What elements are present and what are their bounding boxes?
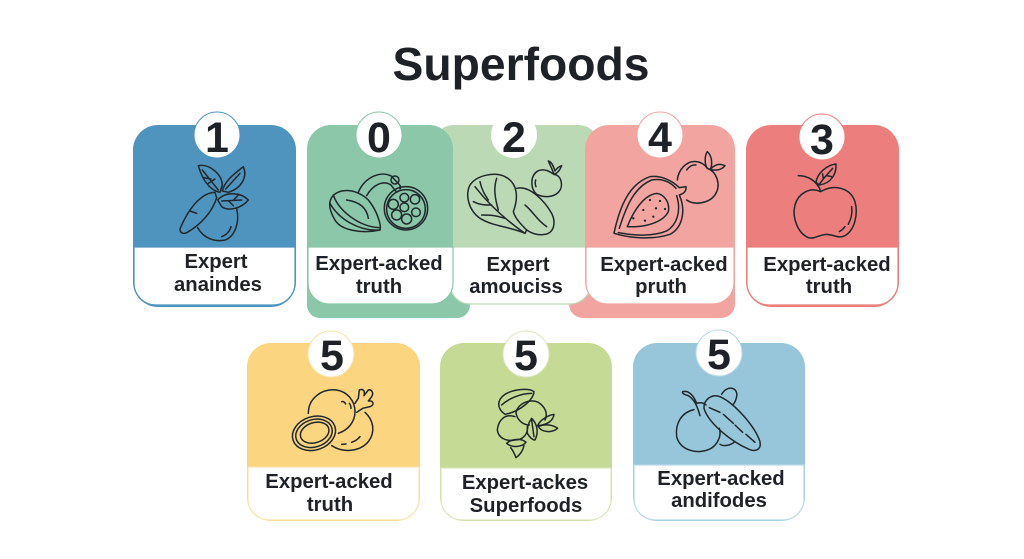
badge 5 xyxy=(308,331,354,380)
card 7: lime, Expert-ackes Superfoods xyxy=(440,331,612,521)
label xyxy=(462,472,588,517)
label: truth xyxy=(307,494,353,516)
icon: papaya half and fruit xyxy=(614,152,725,238)
card 4: salmon, Expert-acked pruth xyxy=(585,112,735,305)
label: amouciss xyxy=(469,276,563,298)
badge 5: 5 xyxy=(320,332,344,380)
badge 0: 0 xyxy=(367,114,391,162)
label: Expert xyxy=(184,251,248,273)
icon: carrot, orange and leaves xyxy=(180,165,248,241)
label xyxy=(600,254,728,298)
badge 3: 3 xyxy=(810,116,834,164)
badge 0 xyxy=(356,112,402,162)
label xyxy=(265,471,393,516)
label: truth xyxy=(356,276,402,298)
label: anaindes xyxy=(174,274,262,296)
label: Expert xyxy=(486,254,550,276)
label: Expert-acked xyxy=(265,471,393,493)
label: Expert-acked xyxy=(763,254,891,276)
label: truth xyxy=(806,276,852,298)
badge 4: 4 xyxy=(648,114,672,162)
icon: split tropical fruit and pods xyxy=(330,174,428,232)
label: Superfoods xyxy=(470,495,582,517)
label: Expert-acked xyxy=(657,468,785,490)
card 4 backing tail: salmon xyxy=(569,240,735,318)
badge 5 xyxy=(503,331,549,380)
label xyxy=(763,254,891,298)
badge 2: 2 xyxy=(502,114,526,162)
label xyxy=(174,251,262,296)
label xyxy=(315,253,443,298)
badge 4 xyxy=(637,112,683,162)
label: Expert-acked xyxy=(315,253,443,275)
title: Superfoods xyxy=(392,38,650,90)
label: Expert-ackes xyxy=(462,472,588,494)
card 2 backing tail: teal xyxy=(307,240,470,318)
card 1: blue, Expert anaindes xyxy=(133,112,296,307)
card 6: yellow, Expert-acked truth xyxy=(247,331,420,521)
badge 3 xyxy=(799,114,845,164)
card 8: light blue, Expert-acked andifodes xyxy=(633,330,805,521)
badge 1 xyxy=(194,112,240,162)
label xyxy=(657,468,785,512)
icon: pomegranate and sliced ring xyxy=(288,390,373,456)
icon: round fruit and cucumber xyxy=(676,388,760,451)
icon: spinach leaves and apple xyxy=(468,161,562,235)
card 3: light green, Expert amouciss xyxy=(432,112,600,304)
badge 5 xyxy=(696,330,742,379)
badge 1: 1 xyxy=(205,114,229,162)
badge 5: 5 xyxy=(514,332,538,380)
badge 2 xyxy=(491,112,537,162)
badge 5: 5 xyxy=(707,331,731,379)
card 2: teal, Expert-acked truth xyxy=(307,112,453,305)
label: Expert-acked xyxy=(600,254,728,276)
icon: apple with leaf xyxy=(794,164,856,238)
label: andifodes xyxy=(671,490,767,512)
icon: berries, nut and leaves xyxy=(497,389,558,458)
label: pruth xyxy=(635,276,687,298)
card 5: red, Expert-acked truth xyxy=(746,114,899,307)
label xyxy=(469,254,563,298)
